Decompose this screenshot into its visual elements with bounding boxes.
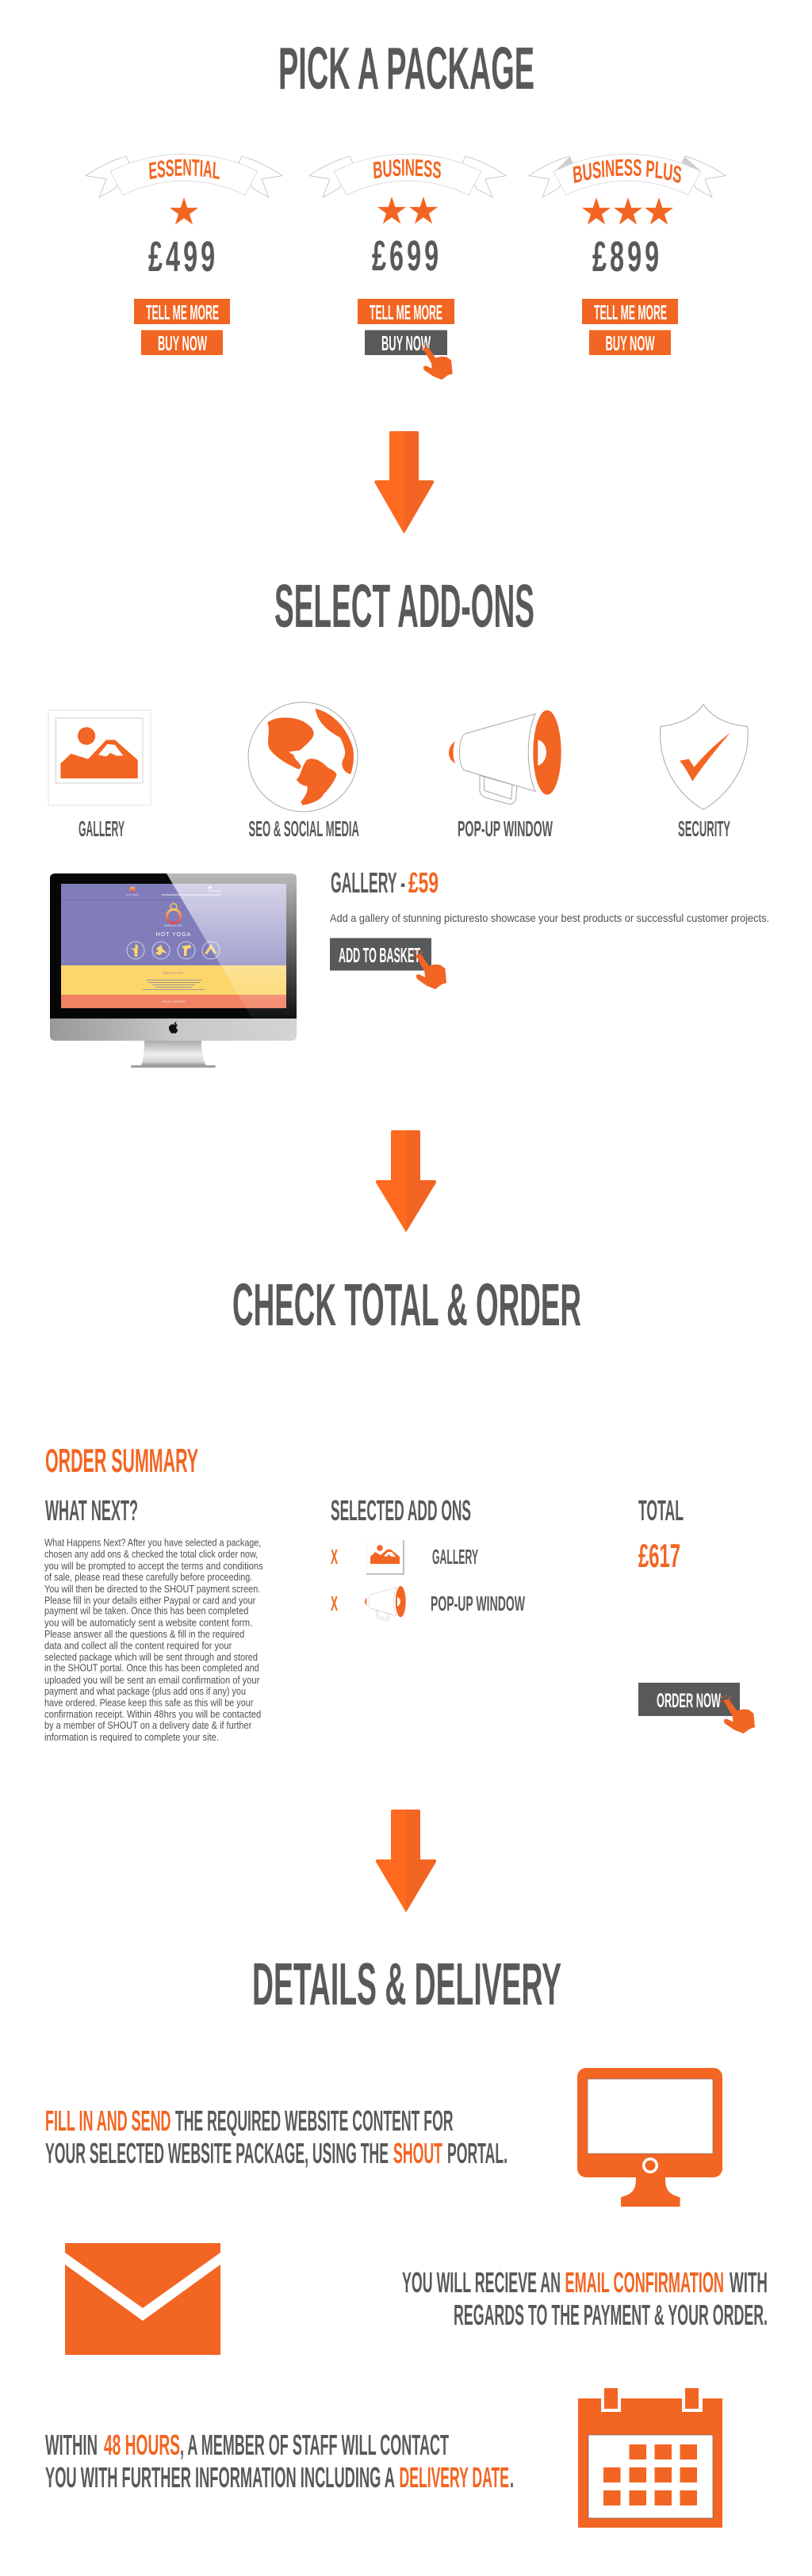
icon: pointing hand bbox=[412, 950, 446, 989]
add-on: gallery bbox=[48, 710, 151, 841]
row: gallery bbox=[331, 1540, 478, 1574]
body text: information is required to complete your site. bbox=[44, 1732, 219, 1743]
button: buy now bbox=[141, 330, 223, 355]
ribbon: business plus bbox=[528, 154, 726, 198]
price: £699 bbox=[372, 233, 442, 280]
icon: two stars bbox=[377, 197, 438, 224]
icon: monitor bbox=[577, 2068, 722, 2207]
panel: select add-ons: SEO & SOCIAL MEDIA bbox=[249, 816, 359, 841]
text: email confirmation: YOU WILL RECIEVE AN bbox=[402, 2266, 561, 2299]
text: within 48 hours bbox=[45, 2429, 514, 2494]
text: email confirmation: WITH bbox=[730, 2266, 768, 2299]
package: business plus bbox=[528, 154, 726, 355]
icon: envelope bbox=[65, 2243, 220, 2355]
button: tell me more: TELL ME MORE bbox=[370, 300, 442, 324]
mockup: desktop monitor bbox=[50, 873, 297, 1068]
body text: you will be automaticly sent a website content form. bbox=[44, 1618, 252, 1629]
subheading: order summary: ORDER SUMMARY bbox=[45, 1442, 198, 1479]
panel: details and delivery bbox=[45, 1951, 768, 2528]
ribbon: essential bbox=[85, 154, 283, 198]
mockup: desktop monitor: TEACHERS bbox=[162, 999, 186, 1003]
add-on: pop-up window bbox=[449, 710, 561, 841]
text: fill in and send: YOUR SELECTED WEBSITE PACKAGE, USING THE bbox=[45, 2137, 389, 2169]
row: pop-up window: X bbox=[331, 1592, 338, 1615]
ribbon: business: BUSINESS bbox=[373, 159, 441, 179]
body text: payment wil be taken. Once this has been completed bbox=[44, 1606, 248, 1617]
price: £899 bbox=[592, 234, 662, 281]
heading: gallery price: £59 bbox=[408, 866, 439, 899]
button: add to basket bbox=[330, 938, 431, 970]
panel: details and delivery: PORTAL. bbox=[447, 2137, 508, 2169]
ribbon: essential: ESSENTIAL bbox=[149, 159, 220, 179]
body text: you will be prompted to accept the terms and conditions bbox=[44, 1561, 263, 1572]
mockup: desktop monitor: HOT YOGA bbox=[126, 893, 139, 896]
mockup: desktop monitor: BREATHE bbox=[164, 924, 183, 927]
ribbon: business plus: BUSINESS PLUS bbox=[573, 159, 682, 184]
title: pick a package: PICK A PACKAGE bbox=[278, 36, 534, 102]
row: gallery: X bbox=[331, 1545, 338, 1569]
button: tell me more bbox=[358, 299, 454, 324]
button: buy now: BUY NOW bbox=[158, 331, 207, 355]
button: buy now (hover) bbox=[365, 330, 447, 355]
body text: have ordered. Please keep this safe as this will be your bbox=[44, 1698, 253, 1709]
row: pop-up window bbox=[331, 1586, 525, 1621]
panel: check total and order bbox=[44, 1272, 755, 1743]
arrow: down to add-ons bbox=[374, 431, 434, 533]
button: tell me more: TELL ME MORE bbox=[594, 300, 667, 324]
text: within 48 hours: WITHIN bbox=[45, 2429, 98, 2461]
arrow: down to delivery bbox=[376, 1810, 436, 1912]
add-on: security: SECURITY bbox=[678, 816, 730, 841]
body text: payment and what package (plus add ons if any) you bbox=[44, 1686, 246, 1697]
arrow: down to total bbox=[376, 1130, 436, 1232]
panel: pick a package bbox=[85, 36, 726, 380]
body text: uploaded you will be sent an email confirmation of your bbox=[44, 1675, 259, 1686]
label: POP-UP WINDOW bbox=[458, 816, 553, 841]
body text: Please answer all the questions & fill in the required bbox=[44, 1629, 244, 1640]
body text: selected package which will be sent through and stored bbox=[44, 1652, 258, 1663]
price: £499 bbox=[148, 234, 218, 281]
body text: by a member of SHOUT on a delivery date & if further bbox=[44, 1720, 251, 1731]
text: fill in and send bbox=[45, 2104, 508, 2169]
detail: gallery description bbox=[330, 866, 769, 989]
body text: chosen any add ons & checked the total click order now, bbox=[44, 1549, 258, 1560]
button: add to basket: ADD TO BASKET bbox=[339, 943, 420, 967]
body text: of sale, please read these carefully before proceeding. bbox=[44, 1572, 252, 1583]
icon: three stars bbox=[582, 197, 673, 224]
total price: £617 bbox=[638, 1537, 680, 1574]
description text: Add a gallery of stunning picturesto showcase your best products or successful customer projects. bbox=[330, 912, 769, 924]
text: fill in and send: FILL IN AND SEND bbox=[45, 2104, 171, 2137]
package: business bbox=[308, 154, 507, 380]
heading: gallery price: GALLERY - bbox=[331, 866, 405, 899]
mockup: desktop monitor: BREATHE bbox=[163, 971, 184, 975]
icon: picture frame bbox=[48, 710, 151, 805]
column: selected add ons: GALLERY bbox=[432, 1545, 478, 1569]
package: essential bbox=[85, 154, 283, 355]
body text: confirmation receipt. Within 48hrs you will be contacted bbox=[44, 1709, 261, 1720]
icon: pointing hand bbox=[419, 342, 453, 380]
text: within 48 hours: , A MEMBER OF STAFF WILL CONTACT bbox=[180, 2429, 449, 2461]
body text: data and collect all the content required for your bbox=[44, 1641, 232, 1652]
text: fill in and send: THE REQUIRED WEBSITE CONTENT FOR bbox=[175, 2104, 454, 2137]
column: what next bbox=[44, 1494, 263, 1743]
row: pop-up window: POP-UP WINDOW bbox=[431, 1592, 525, 1615]
text: within 48 hours: YOU WITH FURTHER INFORMATION INCLUDING A bbox=[45, 2461, 395, 2494]
button: buy now (hover): BUY NOW bbox=[381, 331, 431, 355]
icon: pointing hand bbox=[719, 1695, 755, 1733]
add-on: security bbox=[660, 705, 748, 841]
subheading: what next: WHAT NEXT? bbox=[45, 1494, 138, 1527]
icon: globe bbox=[248, 702, 358, 812]
icon: shield with check bbox=[660, 705, 748, 809]
button: buy now bbox=[589, 330, 671, 355]
button: tell me more: TELL ME MORE bbox=[146, 300, 219, 324]
body text: Please fill in your details either Paypal or card and your bbox=[44, 1595, 255, 1606]
panel: select add-ons: SELECT ADD-ONS bbox=[274, 572, 534, 640]
button: tell me more bbox=[582, 299, 678, 324]
panel: details and delivery: . bbox=[510, 2461, 514, 2494]
column: selected add ons bbox=[331, 1494, 525, 1621]
ribbon: business bbox=[308, 154, 507, 198]
icon: calendar bbox=[578, 2388, 722, 2528]
add-on: seo and social media bbox=[248, 702, 359, 841]
icon: one star bbox=[170, 197, 198, 224]
text: fill in and send: SHOUT bbox=[393, 2137, 442, 2169]
column: selected add ons: SELECTED ADD ONS bbox=[331, 1494, 471, 1527]
mockup: desktop monitor: HOT YOGA bbox=[156, 932, 191, 938]
text: within 48 hours: 48 HOURS bbox=[104, 2429, 180, 2461]
text: within 48 hours: DELIVERY DATE bbox=[400, 2461, 509, 2494]
body text: What Happens Next? After you have selected a package, bbox=[44, 1538, 261, 1549]
icon: megaphone bbox=[449, 710, 561, 804]
add-on: gallery: GALLERY bbox=[79, 816, 124, 841]
button: order now bbox=[638, 1683, 740, 1716]
column: total: TOTAL bbox=[638, 1494, 684, 1527]
body text: in the SHOUT portal. Once this has been completed and bbox=[44, 1663, 259, 1674]
text: email confirmation bbox=[402, 2266, 768, 2331]
column: total bbox=[638, 1494, 755, 1733]
button: buy now: BUY NOW bbox=[606, 331, 655, 355]
panel: select add-ons bbox=[48, 572, 769, 1068]
body text: You will then be directed to the SHOUT payment screen. bbox=[44, 1584, 260, 1595]
button: tell me more bbox=[134, 299, 230, 324]
body text bbox=[44, 1538, 263, 1743]
button: order now: ORDER NOW bbox=[657, 1690, 721, 1712]
